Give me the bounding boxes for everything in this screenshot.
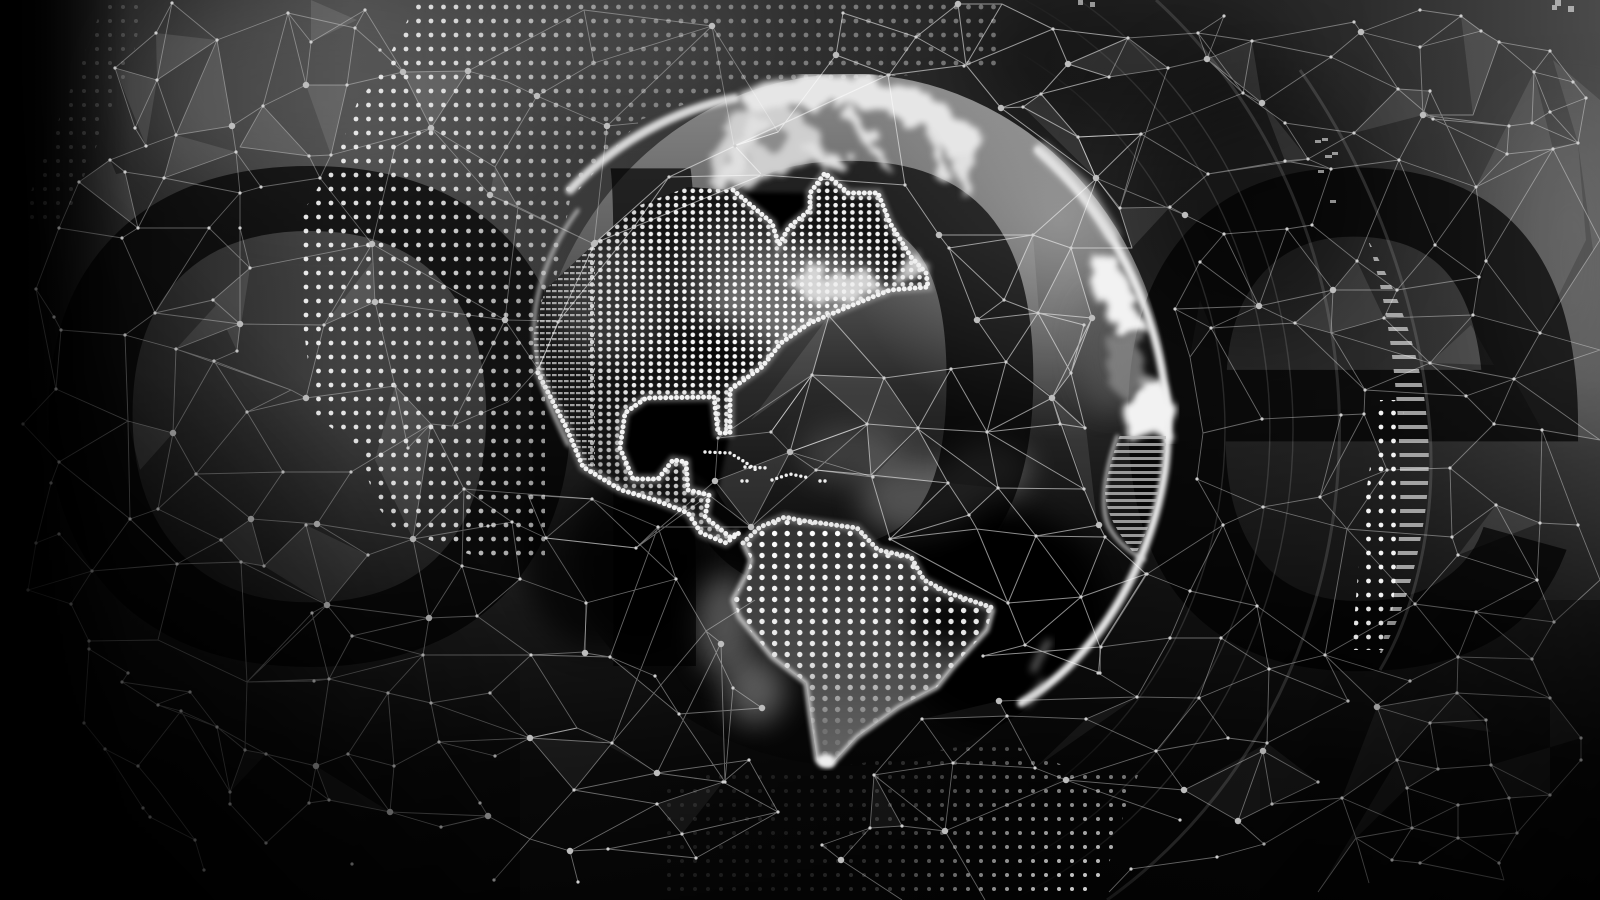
land fill: [534, 176, 928, 541]
land fill: [734, 518, 992, 762]
rim: upper left arc: [570, 98, 735, 190]
outer sphere dot field: bottom: [667, 747, 1138, 891]
rim: left arc: [534, 210, 578, 445]
lower middle network: [390, 375, 873, 882]
globe network: [539, 4, 1146, 673]
coastline: [743, 517, 993, 608]
Caribbean islands: [705, 420, 826, 481]
globe interior: [556, 74, 1162, 734]
mesh nodes: hubs: [173, 4, 1423, 860]
coastline glow: [536, 173, 928, 543]
right side network: [822, 10, 1600, 900]
globe rim: [534, 98, 1167, 703]
dark lettering "Ope": [81, 160, 1578, 671]
left side network: [23, 3, 778, 870]
northeast bright cluster: [782, 255, 926, 310]
rim: soft glow top right: [1042, 150, 1112, 235]
concentric orbit rings: [830, 0, 1339, 900]
Greenland and arctic ice: [705, 90, 975, 196]
Hudson Bay and Gulf shadows: [620, 192, 810, 490]
South America: [720, 510, 1010, 770]
coastline glow: [743, 517, 993, 608]
North America: [520, 160, 940, 560]
far left faint dots: [20, 0, 145, 220]
letter O: O: [20, 30, 599, 801]
outer sphere dot field: upper left: [296, 0, 1000, 560]
coastline dots: [536, 173, 928, 543]
right limb continent: [1025, 250, 1172, 705]
rim: right arc: [1021, 150, 1167, 703]
right dotted crescent: [1078, 0, 1574, 670]
